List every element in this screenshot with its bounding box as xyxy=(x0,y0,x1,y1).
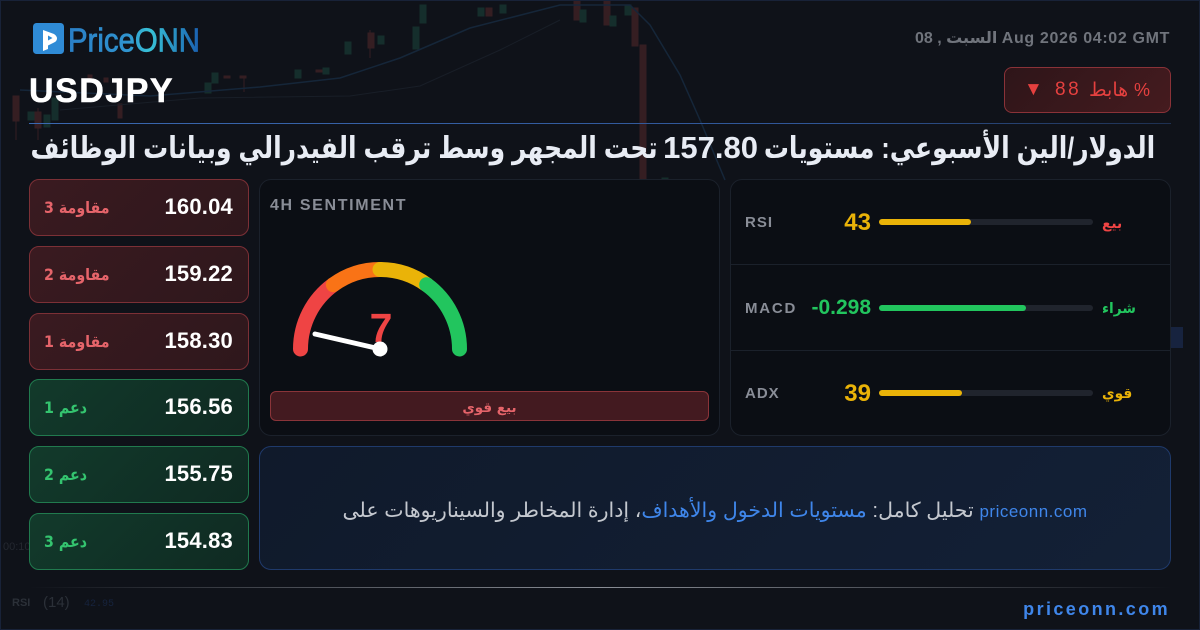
MACD bar xyxy=(879,305,1093,311)
level: resistance 2: 159.22 xyxy=(164,261,233,286)
background chart: RSI xyxy=(12,597,30,609)
panel: 4H sentiment xyxy=(259,179,720,436)
level: resistance 1 xyxy=(29,313,249,370)
MACD value: -0.298 xyxy=(811,296,871,319)
ADX value: 39 xyxy=(844,380,871,407)
level: support 1: 156.56 xyxy=(164,394,233,419)
indicator: MACD: MACD xyxy=(745,300,797,317)
background chart: 00:10 xyxy=(3,541,31,553)
level: resistance 1: مقاومة 1 xyxy=(44,332,110,351)
level: support 2: 155.75 xyxy=(164,461,233,486)
trend badge: 88 xyxy=(1055,79,1081,100)
RSI value: 43 xyxy=(844,209,871,236)
level: resistance 3: 160.04 xyxy=(164,194,233,219)
date: 08 , السبت Aug 2026 04:02 GMT xyxy=(915,30,1170,47)
footer url: priceonn.com xyxy=(1023,599,1170,619)
level: resistance 3 xyxy=(29,179,249,236)
call to action text: تحليل كامل: مستويات الدخول والأهداف، إدارة المخاطر والسيناريوهات على priceonn.com xyxy=(342,499,1088,522)
RSI bar xyxy=(879,219,1093,225)
indicator: RSI: RSI xyxy=(745,214,773,231)
trend badge: ▼ xyxy=(1024,79,1043,100)
level: support 1 xyxy=(29,379,249,436)
indicator: ADX: ADX xyxy=(745,385,780,402)
level: resistance 2: مقاومة 2 xyxy=(44,265,110,284)
level: support 2: دعم 2 xyxy=(44,465,87,484)
level: support 3: 154.83 xyxy=(164,528,233,553)
sentiment banner: بيع قوي xyxy=(462,400,517,416)
trend badge xyxy=(1004,67,1171,113)
background chart: (14) xyxy=(43,594,70,611)
level: support 3: دعم 3 xyxy=(44,532,87,551)
gauge xyxy=(293,262,467,356)
sentiment banner xyxy=(270,391,709,421)
level: support 3 xyxy=(29,513,249,570)
ADX bar xyxy=(879,390,1093,396)
level: support 2 xyxy=(29,446,249,503)
level: support 1: دعم 1 xyxy=(44,398,87,417)
level: resistance 3: مقاومة 3 xyxy=(44,198,110,217)
panel: call to action xyxy=(259,446,1171,570)
RSI status: بيع xyxy=(1102,216,1122,232)
level: resistance 1: 158.30 xyxy=(164,328,233,353)
MACD status: شراء xyxy=(1102,301,1136,317)
trend badge: % xyxy=(1134,80,1150,100)
header divider xyxy=(29,123,1171,124)
heading: 4H sentiment: 4H SENTIMENT xyxy=(270,197,407,214)
symbol: USDJPY xyxy=(29,72,174,110)
headline: 157.80 xyxy=(663,130,758,165)
headline: الدولار/الين الأسبوعي: مستويات تحت المجهر وسط ترقب الفيدرالي وبيانات الوظائف xyxy=(30,132,1155,165)
gauge: 7 xyxy=(370,305,392,351)
background chart: 42.95 xyxy=(84,599,114,610)
ADX status: قوي xyxy=(1102,386,1132,402)
footer divider xyxy=(29,587,1171,588)
panel: indicators xyxy=(730,179,1171,436)
trend badge: هابط xyxy=(1089,79,1128,101)
level: resistance 2 xyxy=(29,246,249,303)
